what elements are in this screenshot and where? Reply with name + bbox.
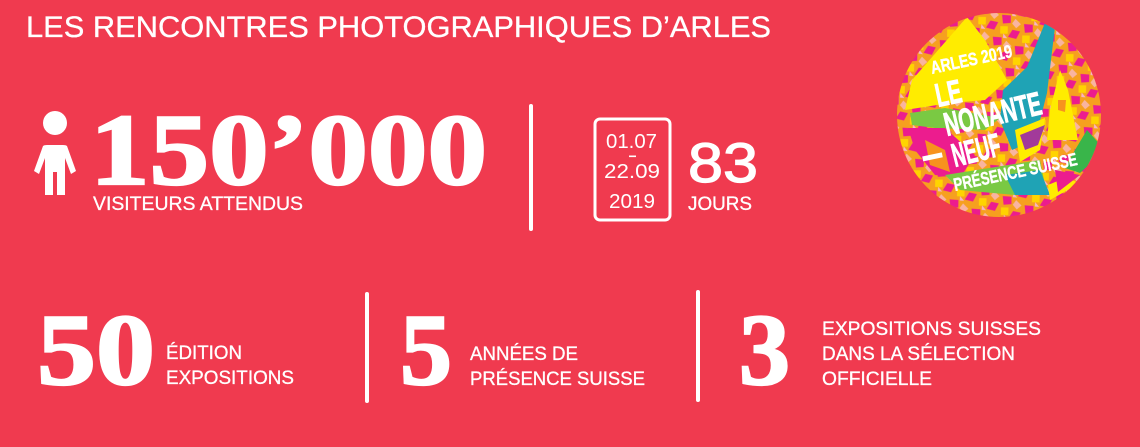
statistic: 3: 3	[739, 294, 790, 407]
statistic: 50: EXPOSITIONS	[166, 368, 294, 389]
statistic: days: JOURS	[688, 194, 752, 215]
statistic: 5: ANNÉES DE	[470, 344, 578, 365]
statistic: 50: 50	[37, 294, 155, 407]
statistic: 5: PRÉSENCE SUISSE	[470, 369, 645, 390]
poster badge: Arles 2019	[895, 10, 1105, 220]
date box: 2019	[609, 191, 655, 213]
divider	[529, 104, 533, 231]
statistic: 5: 5	[400, 294, 452, 407]
statistic: 3: EXPOSITIONS SUISSES	[822, 319, 1041, 340]
statistic: 50	[37, 294, 294, 407]
statistic: visitors: VISITEURS ATTENDUS	[93, 194, 303, 215]
statistic: 3	[739, 294, 1041, 407]
date box	[595, 119, 670, 220]
statistic: days	[688, 131, 758, 215]
statistic: days: 83	[688, 131, 758, 194]
divider	[696, 290, 700, 402]
statistic: 50: ÉDITION	[166, 343, 242, 364]
title: LES RENCONTRES PHOTOGRAPHIQUES D’ARLES	[26, 11, 771, 44]
statistic: visitors: 150’000	[90, 94, 487, 207]
poster badge: Arles 2019: NONANTE	[940, 84, 1045, 143]
date box: 01.07	[606, 131, 657, 153]
poster badge: Arles 2019: ARLES 2019	[929, 41, 1014, 78]
date box: 22.09	[604, 161, 660, 183]
statistic: 3: DANS LA SÉLECTION	[822, 344, 1015, 365]
poster badge: Arles 2019: NEUF	[948, 126, 1004, 174]
poster badge: Arles 2019: PRÉSENCE SUISSE	[951, 148, 1079, 195]
icon: person	[34, 111, 76, 195]
divider	[365, 292, 369, 403]
statistic: 5	[400, 294, 645, 407]
poster badge: Arles 2019: LE	[932, 72, 965, 114]
statistic: 3: OFFICIELLE	[822, 369, 932, 390]
